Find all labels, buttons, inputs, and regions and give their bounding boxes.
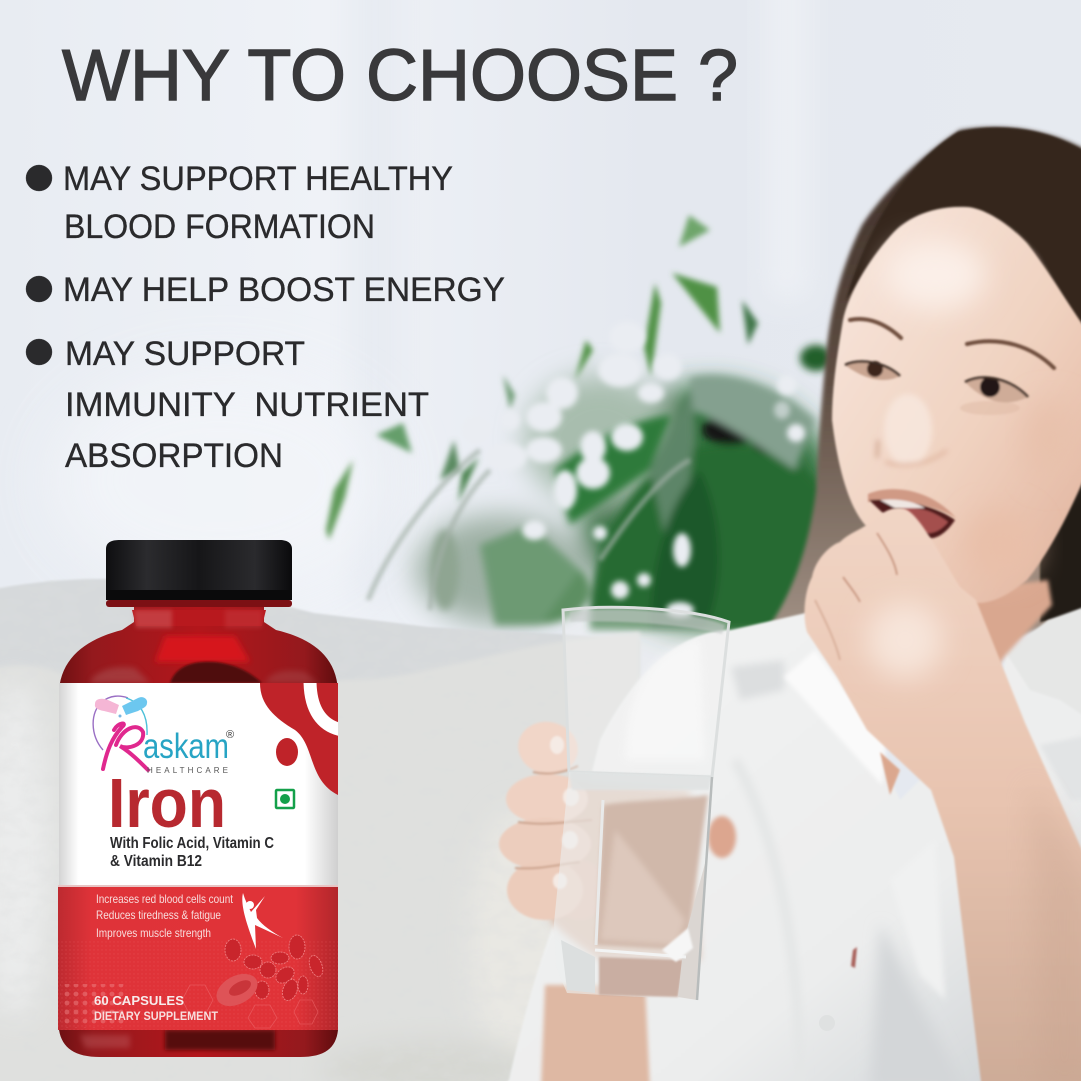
glass of water — [554, 607, 729, 1000]
bullet 1: MAY SUPPORT HEALTHY — [63, 160, 453, 198]
raskam logo: ® — [226, 729, 234, 741]
mouth — [868, 489, 956, 538]
bottle glass — [59, 600, 338, 1057]
bullet 3: ABSORPTION — [65, 437, 283, 475]
title: WHY TO CHOOSE ? — [62, 36, 738, 116]
hair — [768, 127, 1081, 640]
label red swirl — [260, 680, 342, 795]
icon: athlete — [242, 893, 283, 949]
bullet 3 — [26, 335, 429, 475]
benefit lines — [96, 892, 234, 940]
face — [832, 207, 1081, 603]
product subtitle: & Vitamin B12 — [110, 853, 202, 870]
raskam logo — [93, 696, 234, 775]
nose — [877, 394, 947, 466]
shirt — [500, 605, 1081, 1081]
water — [554, 772, 712, 1000]
raskam logo: askam — [143, 727, 229, 766]
palm behind glass — [550, 780, 700, 960]
bullet 1 — [26, 160, 453, 246]
raskam logo: HEALTHCARE — [147, 766, 228, 775]
empty upper glass — [563, 607, 729, 777]
bullet 1: BLOOD FORMATION — [64, 208, 375, 246]
label red panel — [58, 885, 338, 1030]
hand holding glass — [499, 716, 736, 1081]
woman — [500, 127, 1081, 1081]
black cap — [106, 540, 292, 600]
bullet 2: MAY HELP BOOST ENERGY — [63, 271, 505, 309]
thumb — [708, 816, 736, 858]
hexagon pattern — [182, 985, 318, 1028]
benefit lines: Increases red blood cells count — [96, 892, 234, 906]
hand and forearm — [805, 508, 1081, 1081]
fingers — [499, 716, 605, 920]
product subtitle — [110, 835, 274, 870]
eyes — [845, 361, 1028, 415]
wrist — [541, 985, 650, 1081]
supplement line: DIETARY SUPPLEMENT — [94, 1009, 219, 1023]
eyebrows — [850, 319, 1054, 368]
benefits list — [26, 160, 505, 475]
benefit lines: Reduces tiredness & fatigue — [96, 908, 221, 922]
blurred green plant — [326, 215, 840, 635]
product name: Iron — [108, 764, 226, 842]
sofa cushion — [0, 630, 640, 1081]
product bottle — [58, 540, 342, 1057]
bullet 3: IMMUNITY NUTRIENT — [65, 386, 429, 424]
capsule count: 60 CAPSULES — [94, 994, 184, 1008]
benefit lines: Improves muscle strength — [96, 926, 211, 940]
neck — [950, 580, 1052, 670]
label white panel — [59, 680, 342, 885]
product subtitle: With Folic Acid, Vitamin C — [110, 835, 274, 852]
bullet 3: MAY SUPPORT — [65, 335, 305, 373]
blood cells — [225, 935, 325, 1003]
sofa back — [0, 579, 640, 1081]
large blood cell — [211, 967, 263, 1013]
veg mark — [276, 790, 294, 808]
